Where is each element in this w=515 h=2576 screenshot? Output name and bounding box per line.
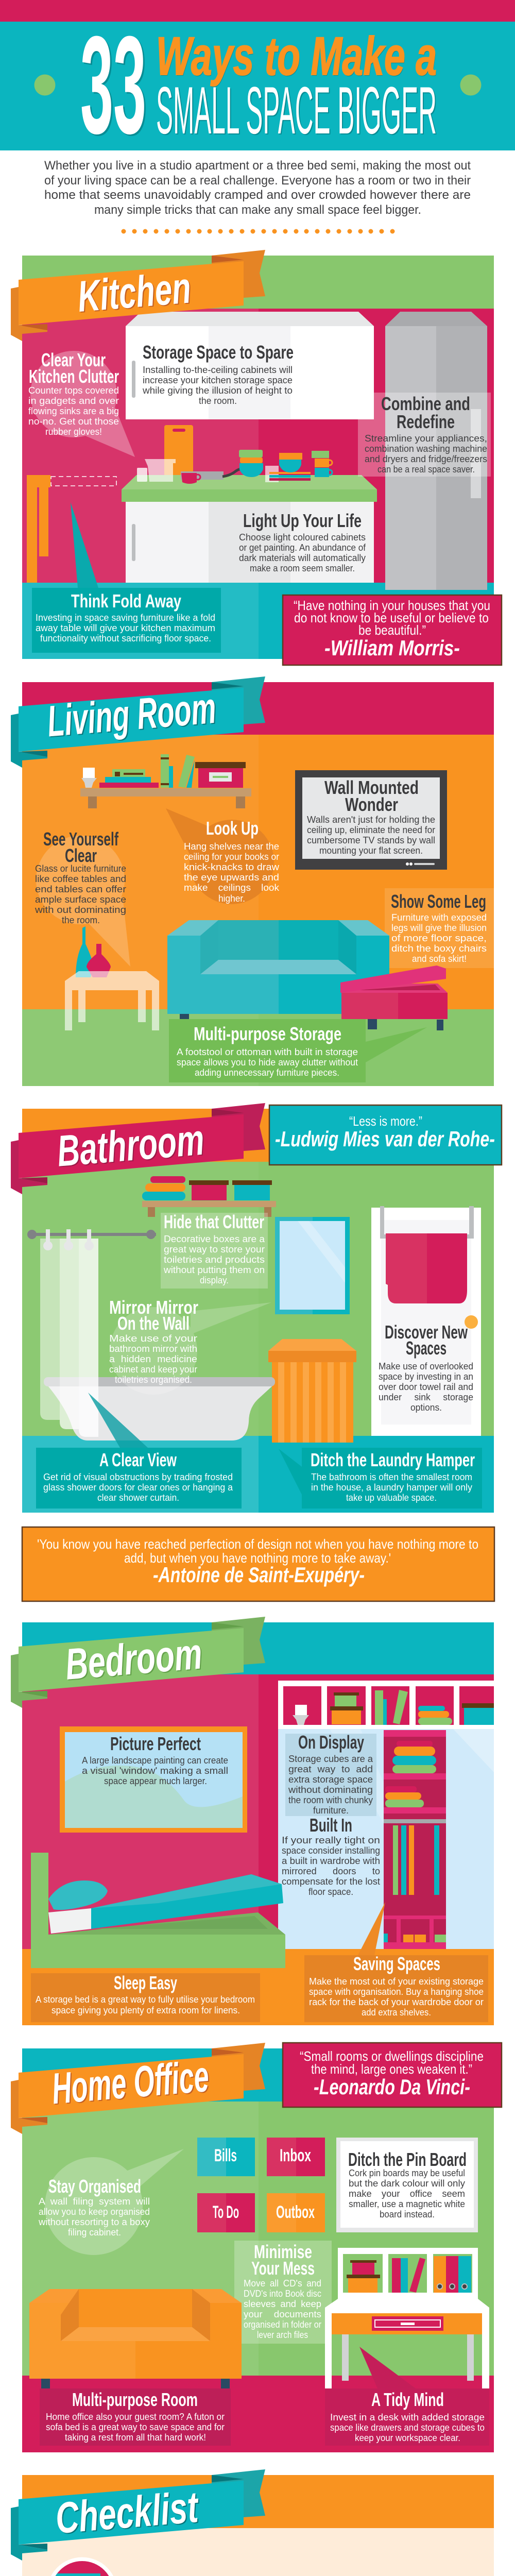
illustration: laundry hamper: [268, 1339, 356, 1443]
text: clear your kitchen clutter: Counter tops covered: [28, 385, 119, 396]
text box: multi-purpose room: Home office also your guest room? A futon or: [46, 2412, 225, 2422]
text box: on display: furniture.: [313, 1805, 349, 1816]
ribbon heading: checklist: [11, 2469, 265, 2561]
text: stay organised: A wall filing system will: [39, 2196, 150, 2207]
icon: inbox: [267, 2138, 325, 2176]
ribbon heading: bathroom: Bathroom: [56, 1116, 207, 1177]
panel: living room: [11, 676, 494, 1086]
text: show some leg: [391, 891, 487, 964]
text box: minimise your mess: [234, 2241, 332, 2344]
text: storage space to spare: while giving the illusion of height to: [142, 385, 293, 396]
text: wall mounted wonder: [307, 777, 435, 856]
text: look up: higher.: [218, 893, 245, 904]
illustration: mirror: [275, 1217, 350, 1314]
text box: on display: without dominating: [288, 1785, 373, 1795]
text box: minimise your mess: your documents: [244, 2309, 321, 2319]
text: discover new spaces: over door towel rail and: [379, 1382, 473, 1392]
text: light up your life: make a room seem smaller.: [250, 563, 355, 573]
text box: saving spaces: Saving Spaces: [353, 1953, 440, 1974]
text: hide that clutter: Decorative boxes are a: [164, 1234, 265, 1244]
text: picture perfect: [82, 1733, 228, 1786]
text: wall mounted wonder: mounting your flat screen.: [319, 845, 423, 856]
text: picture perfect: A large landscape painting can create: [82, 1755, 228, 1766]
text box: sleep easy: Sleep Easy: [114, 1972, 177, 1993]
illustration: wall shelf with books: [80, 754, 251, 808]
text box: sleep easy: space giving you plenty of extra room for linens.: [52, 2005, 240, 2015]
text: hide that clutter: [163, 1211, 265, 1285]
text box: multi-purpose room: [40, 2388, 231, 2446]
text: built in: [282, 1815, 380, 1897]
text: discover new spaces: under sink storage: [379, 1392, 473, 1402]
ribbon heading: living room: Living Room: [46, 685, 219, 747]
pointer: [279, 1449, 302, 1495]
text: hide that clutter: toiletries and products: [164, 1255, 265, 1265]
text: picture perfect: Picture Perfect: [110, 1733, 201, 1754]
quote: leonardo da vinci: -Leonardo Da Vinci-: [314, 2075, 470, 2099]
text: built in: a built in wardrobe with: [282, 1856, 380, 1866]
text: light up your life: Choose light coloured cabinets: [239, 532, 366, 543]
ribbon heading: kitchen: Kitchen: [76, 263, 193, 321]
text: storage space to spare: [142, 342, 294, 406]
text: hide that clutter: without putting them on: [163, 1265, 265, 1275]
illustration: wall cabinet: [126, 312, 374, 419]
text box: saving spaces: Make the most out of your existing storage: [309, 1976, 484, 1987]
text box: multi-purpose storage: space allows you to hide away clutter without: [177, 1057, 358, 1067]
text: light up your life: dark materials will automatically: [239, 553, 366, 563]
ribbon heading: living room: [11, 676, 265, 768]
text: built in: If your really tight on: [282, 1835, 380, 1845]
text box: think fold away: Investing in space saving furniture like a fold: [36, 613, 215, 623]
ribbon heading: kitchen: [11, 250, 265, 341]
text: hide that clutter: display.: [200, 1275, 229, 1285]
illustration: towel rail and basket: [371, 1206, 481, 1436]
pointer: [359, 2347, 416, 2388]
text box: think fold away: away table will give your kitchen maximum: [36, 623, 215, 633]
illustration: picture frame: [60, 1726, 247, 1833]
text: discover new spaces: Discover New: [385, 1321, 468, 1343]
ribbon heading: home office: Home Office: [50, 2052, 211, 2113]
speech bubble: see yourself clear: [36, 836, 130, 967]
illustration: desk with shelves: [325, 2248, 489, 2396]
speech bubble: look up: [166, 808, 274, 904]
text: mirror mirror on the wall: On the Wall: [117, 1313, 190, 1334]
illustration: wall shelving and wardrobe background: [278, 1681, 494, 1949]
text: clear your kitchen clutter: Clear Your: [41, 349, 106, 370]
text box: multi-purpose storage: [169, 1019, 427, 1082]
quote: antoine de saint-exupery: [22, 1527, 494, 1601]
ribbon heading: bedroom: Bedroom: [63, 1629, 204, 1689]
text box: saving spaces: rack for the back of your wardrobe door or: [309, 1997, 484, 2007]
text: see yourself clear: [35, 828, 126, 925]
intro text: Whether you live in a studio apartment or a three bed semi, making the most out: [44, 159, 471, 173]
illustration: storage ottoman: [340, 965, 448, 1030]
quote: william morris: “Have nothing in your houses that you: [294, 598, 490, 613]
white board: ditch the pin board: smaller, use a magnetic white: [349, 2199, 465, 2209]
panel: bathroom: [11, 1103, 502, 1513]
panel: bedroom: [11, 1617, 494, 2025]
title: [80, 8, 438, 164]
text box: a clear view: clear shower curtain.: [97, 1493, 179, 1503]
text: look up: knick-knacks to draw: [184, 862, 280, 872]
icon: to do: [197, 2193, 255, 2232]
ribbon heading: checklist: Checklist: [55, 2483, 202, 2544]
text box: think fold away: Think Fold Away: [71, 590, 181, 612]
text: stay organised: Stay Organised: [48, 2176, 141, 2197]
text: storage space to spare: increase your kitchen storage space: [143, 375, 293, 385]
text box: multi-purpose storage: A footstool or ottoman with built in storage: [177, 1047, 358, 1057]
illustration: wardrobe: [384, 1730, 446, 1949]
icon: mirror: [51, 2557, 113, 2576]
text: see yourself clear: Clear: [65, 845, 97, 866]
text box: a tidy mind: keep your workspace clear.: [355, 2433, 460, 2443]
ribbon heading: home office: [11, 2043, 265, 2134]
quote: ludwig mies van der rohe: “Less is more.”: [349, 1113, 422, 1129]
text: show some leg: and sofa skirt!: [412, 954, 467, 964]
text: discover new spaces: options.: [410, 1402, 442, 1413]
pointer: [358, 1902, 385, 1955]
pointer: [71, 502, 98, 588]
text: built in: mirrored doors to: [282, 1866, 380, 1876]
title: 33: [80, 8, 146, 163]
text: clear your kitchen clutter: [28, 349, 119, 437]
text box: a tidy mind: space like drawers and storage cubes to: [330, 2422, 485, 2433]
text: discover new spaces: space by investing in an: [379, 1371, 473, 1382]
speech bubble: stay organised: [45, 2149, 184, 2255]
panel: home office: [11, 2043, 502, 2452]
intro text: home that seems unavoidably cramped and over crowded however there are: [44, 188, 471, 202]
text box: a tidy mind: A Tidy Mind: [371, 2389, 444, 2410]
text: built in: floor space.: [308, 1887, 353, 1897]
text: discover new spaces: Make use of overlooked: [379, 1361, 473, 1371]
text box: combine and redefine: [358, 393, 491, 477]
text: picture perfect: space appear much larger.: [104, 1776, 207, 1786]
text: look up: the eye upwards and: [184, 872, 279, 883]
ribbon heading: bathroom: Bathroom: [55, 1115, 206, 1176]
text box: sleep easy: [31, 1972, 260, 2022]
text box: on display: the room with chunky: [288, 1795, 373, 1805]
text: wall mounted wonder: cumbersome TV stands by wall: [307, 835, 435, 845]
text: wall mounted wonder: Walls aren't just for holding the: [307, 815, 435, 825]
text box: a tidy mind: [325, 2388, 489, 2446]
text: built in: Built In: [310, 1815, 352, 1836]
text: see yourself clear: like coffee tables and: [35, 874, 126, 884]
text box: saving spaces: [304, 1953, 488, 2022]
panel: checklist: [11, 2469, 494, 2576]
icon: inbox: Inbox: [280, 2146, 311, 2165]
quote: william morris: do not know to be useful or believe to: [294, 610, 489, 625]
text: see yourself clear: with out dominating: [35, 905, 126, 915]
text: wall mounted wonder: ceiling up, eliminate the need for: [307, 825, 435, 835]
text box: combine and redefine: combination washing machine: [365, 444, 487, 454]
text: storage space to spare: the room.: [199, 396, 237, 406]
illustration: orange sofa: [29, 2289, 242, 2393]
text: mirror mirror on the wall: [109, 1297, 198, 1385]
illustration: storage bed: [31, 1853, 285, 1968]
text: mirror mirror on the wall: a hidden medicine: [109, 1354, 197, 1364]
icon: bills: Bills: [214, 2146, 237, 2165]
text: discover new spaces: [379, 1321, 473, 1413]
text: built in: space consider installing: [282, 1845, 380, 1856]
quote: leonardo da vinci: [283, 2043, 502, 2107]
text: stay organised: without resorting to a boxy: [38, 2217, 150, 2227]
speech bubble: [30, 351, 135, 457]
text: hide that clutter: Hide that Clutter: [164, 1211, 264, 1232]
quote: antoine de saint-exupery: -Antoine de Saint-Exupéry-: [153, 1563, 365, 1587]
text box: a tidy mind: Invest in a desk with added storage: [330, 2412, 485, 2422]
text box: combine and redefine: can be a real space saver.: [377, 464, 475, 474]
text box: combine and redefine: and dryers and fridge/freezers: [365, 454, 487, 464]
quote: william morris: -William Morris-: [324, 636, 460, 660]
text: clear your kitchen clutter: rubber gloves!: [45, 427, 102, 437]
text box: minimise your mess: lever arch files: [257, 2330, 308, 2340]
text: wall mounted wonder: Wonder: [345, 794, 398, 815]
text: built in: compensate for the lost: [282, 1876, 380, 1887]
text box: minimise your mess: Minimise: [254, 2241, 312, 2262]
text box: ditch the laundry hamper: take up valuable space.: [346, 1493, 437, 1503]
ribbon heading: bedroom: Bedroom: [64, 1630, 205, 1690]
white board: ditch the pin board: make your office seem: [349, 2189, 465, 2199]
white board: ditch the pin board: board instead.: [380, 2209, 435, 2219]
illustration: glass table and vases: [65, 926, 159, 1030]
text: show some leg: legs will give the illusion: [391, 923, 487, 933]
ribbon heading: checklist: Checklist: [54, 2483, 201, 2543]
text box: hide that clutter: [161, 1213, 268, 1289]
text box: a clear view: glass shower doors for clear ones or hanging a: [43, 1482, 233, 1493]
text box: think fold away: functionality without sacrificing floor space.: [40, 633, 211, 643]
text box: on display: [285, 1732, 376, 1816]
text: mirror mirror on the wall: Mirror Mirror: [109, 1297, 198, 1318]
quote: ludwig mies van der rohe: [269, 1105, 502, 1165]
text: stay organised: allow you to keep organised: [39, 2207, 150, 2217]
text box: show some leg: [385, 888, 494, 968]
text: show some leg: ditch the boxy chairs: [391, 943, 487, 954]
text box: minimise your mess: sleeves and keep: [244, 2299, 321, 2309]
text box: ditch the laundry hamper: [302, 1448, 482, 1509]
intro text: of your living space can be a real challenge. Everyone has a room or two in their: [44, 174, 471, 188]
text box: multi-purpose storage: Multi-purpose Storage: [194, 1023, 341, 1044]
text: see yourself clear: See Yourself: [43, 828, 119, 850]
text: see yourself clear: Glass or lucite furniture: [35, 863, 126, 874]
text: hide that clutter: great way to store your: [164, 1244, 265, 1255]
text box: multi-purpose room: Multi-purpose Room: [72, 2389, 198, 2410]
text: look up: ceiling for your books or: [184, 852, 279, 862]
white board: ditch the pin board: but the dark colour will only: [349, 2178, 465, 2189]
quote: leonardo da vinci: the mind, large ones weaken it.”: [311, 2061, 472, 2077]
quote: antoine de saint-exupery: add, but when you have nothing more to take away.': [124, 1550, 391, 1566]
text box: combine and redefine: Streamline your appliances,: [365, 433, 487, 444]
illustration: sink: [44, 1377, 275, 1440]
text: show some leg: of more floor space,: [391, 933, 487, 943]
illustration: fridge: [385, 312, 487, 590]
icon: bills: [197, 2138, 255, 2176]
text box: a clear view: [36, 1448, 242, 1509]
white board: ditch the pin board: Cork pin boards may be useful: [349, 2168, 465, 2178]
text: stay organised: filing cabinet.: [68, 2227, 121, 2238]
text: discover new spaces: Spaces: [406, 1337, 447, 1359]
quote: william morris: [283, 595, 502, 665]
intro text: [44, 159, 471, 217]
ribbon heading: kitchen: Kitchen: [77, 264, 194, 323]
ribbon heading: bathroom: [11, 1103, 265, 1194]
text box: sleep easy: A storage bed is a great way to fully utilise your bedroom: [36, 1994, 255, 2005]
text box: saving spaces: add extra shelves.: [362, 2007, 431, 2018]
text: see yourself clear: ample surface space: [35, 894, 126, 905]
text: storage space to spare: Storage Space to Spare: [143, 342, 294, 363]
text: mirror mirror on the wall: Make use of your: [109, 1333, 197, 1344]
text: picture perfect: a visual 'window' making a small: [82, 1766, 228, 1776]
illustration: shelf with towels and boxes: [142, 1176, 276, 1217]
speech bubble: mirror mirror: [110, 1302, 271, 1395]
dotted divider: [122, 229, 394, 234]
text: mirror mirror on the wall: bathroom mirror with: [109, 1344, 197, 1354]
text box: minimise your mess: Your Mess: [251, 2258, 315, 2279]
text box: multi-purpose room: sofa bed is a great way to save space and for: [46, 2422, 225, 2432]
icon: to do: To Do: [213, 2202, 239, 2222]
text box: multi-purpose storage: adding unnecessary furniture pieces.: [195, 1067, 339, 1078]
text box: combine and redefine: Combine and: [381, 393, 470, 414]
text box: think fold away: [32, 588, 221, 653]
text: clear your kitchen clutter: no-no. Get out those: [28, 416, 119, 427]
ribbon heading: living room: Living Room: [45, 684, 218, 746]
header banner: [0, 0, 515, 164]
quote: william morris: be beautiful.”: [358, 622, 426, 638]
text: light up your life: or get painting. An abundance of: [239, 543, 366, 553]
text: storage space to spare: Installing to-the-ceiling cabinets will: [143, 365, 293, 375]
title: 33: [82, 9, 148, 164]
illustration: kitchen counter and dishes: [122, 425, 377, 583]
ribbon heading: bedroom: [11, 1617, 265, 1708]
pointer: [88, 1393, 148, 1448]
text: see yourself clear: the room.: [62, 915, 100, 925]
text: stay organised: [38, 2176, 150, 2238]
text box: on display: On Display: [298, 1732, 364, 1753]
text: see yourself clear: end tables can offer: [35, 884, 126, 894]
text box: on display: Storage cubes are a: [288, 1754, 373, 1764]
panel: kitchen: [11, 250, 502, 665]
illustration: shower curtain: [27, 1229, 156, 1437]
text box: minimise your mess: organised in folder or: [244, 2319, 321, 2330]
illustration: television: [295, 770, 447, 870]
text: show some leg: Furniture with exposed: [391, 912, 487, 923]
illustration: fold away table: [27, 475, 116, 583]
text: clear your kitchen clutter: flowing sinks are a big: [28, 406, 119, 416]
text: clear your kitchen clutter: Kitchen Clutter: [29, 366, 119, 387]
ribbon heading: home office: Home Office: [51, 2053, 212, 2114]
text box: on display: great way to add: [288, 1764, 373, 1774]
text: light up your life: Light Up Your Life: [243, 510, 362, 531]
text box: combine and redefine: Redefine: [397, 411, 455, 432]
icon: outbox: [267, 2193, 325, 2232]
text box: on display: extra storage space: [288, 1774, 373, 1785]
text: light up your life: [239, 510, 366, 573]
text: look up: make ceilings look: [184, 883, 280, 893]
text: look up: Hang shelves near the: [184, 841, 279, 852]
text: look up: Look Up: [206, 818, 259, 839]
text: clear your kitchen clutter: in gadgets and over: [28, 396, 119, 406]
text box: minimise your mess: Move all CD's and: [244, 2278, 321, 2289]
text box: multi-purpose room: taking a rest from all that hard work!: [65, 2432, 206, 2443]
text box: ditch the laundry hamper: in the house, a laundry hamper will only: [311, 1482, 472, 1493]
illustration: wall files: [197, 2138, 325, 2232]
intro text: many simple tricks that can make any small space feel bigger.: [94, 203, 421, 217]
text box: a clear view: Get rid of visual obstructions by trading frosted: [43, 1472, 233, 1482]
white board: ditch the pin board: [336, 2138, 478, 2232]
icon: outbox: Outbox: [276, 2202, 315, 2222]
text box: saving spaces: space with organisation. Buy a hanging shoe: [309, 1987, 484, 1997]
text: mirror mirror on the wall: toiletries organised.: [115, 1375, 192, 1385]
text box: a clear view: A Clear View: [99, 1449, 177, 1470]
text: look up: [184, 818, 280, 904]
text: wall mounted wonder: Wall Mounted: [324, 777, 419, 798]
text box: ditch the laundry hamper: The bathroom is often the smallest room: [311, 1472, 472, 1482]
illustration: sofa: [167, 920, 389, 1029]
text: mirror mirror on the wall: cabinet and keep your: [109, 1364, 197, 1375]
text box: minimise your mess: DVD's into Book disc: [244, 2289, 321, 2299]
quote: leonardo da vinci: “Small rooms or dwellings discipline: [300, 2048, 484, 2064]
